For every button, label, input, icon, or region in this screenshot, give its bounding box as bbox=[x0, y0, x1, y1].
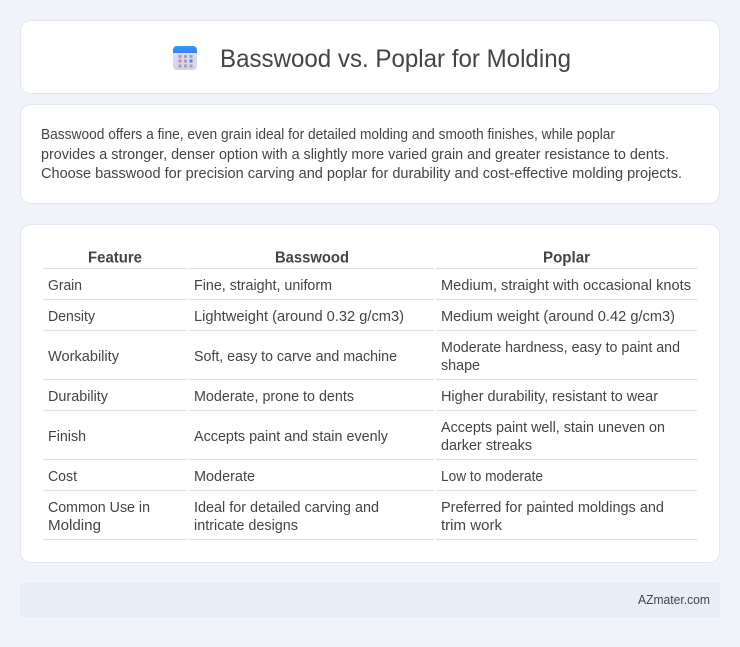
title text: Basswood vs. Poplar for Molding bbox=[220, 45, 571, 73]
row: grain bbox=[43, 278, 697, 300]
row: common use in molding bbox=[43, 500, 697, 540]
row: durability: Higher durability, resistant to wear bbox=[441, 389, 658, 405]
panel: introduction bbox=[20, 104, 720, 204]
row: common use in molding: trim work bbox=[441, 518, 503, 534]
table header bbox=[43, 250, 697, 268]
row: common use in molding: Molding bbox=[48, 518, 101, 534]
row: cost: Low to moderate bbox=[441, 469, 543, 485]
row: workability bbox=[43, 340, 697, 380]
intro text bbox=[41, 127, 682, 182]
row: common use in molding: Preferred for painted moldings and bbox=[441, 500, 664, 516]
row: workability: Moderate hardness, easy to paint and bbox=[441, 340, 680, 356]
row: density bbox=[43, 309, 697, 330]
row: workability: shape bbox=[441, 358, 480, 374]
intro text: Basswood offers a fine, even grain ideal for detailed molding and smooth finishes, while poplar bbox=[41, 127, 615, 143]
row: grain: Fine, straight, uniform bbox=[194, 278, 332, 294]
row: durability: Moderate, prone to dents bbox=[194, 389, 354, 405]
row: cost bbox=[43, 469, 697, 490]
row: common use in molding: Common Use in bbox=[48, 500, 150, 516]
panel: comparison table bbox=[20, 224, 720, 562]
row: cost: Moderate bbox=[194, 469, 255, 485]
table header: Basswood bbox=[275, 250, 349, 266]
footer bar bbox=[20, 583, 720, 617]
row: durability: Durability bbox=[48, 389, 109, 405]
row: grain: Medium, straight with occasional knots bbox=[441, 278, 691, 294]
row: workability: Workability bbox=[48, 349, 120, 365]
footer brand text: AZmater.com bbox=[638, 593, 710, 607]
table header: Feature bbox=[88, 250, 142, 266]
row: common use in molding: intricate designs bbox=[194, 518, 298, 534]
row: finish: Accepts paint and stain evenly bbox=[194, 429, 389, 445]
intro text: provides a stronger, denser option with a slightly more varied grain and greater resistance to dents. bbox=[41, 147, 669, 163]
row: density: Medium weight (around 0.42 g/cm3) bbox=[441, 309, 675, 325]
row: workability: Soft, easy to carve and machine bbox=[194, 349, 397, 365]
row: finish bbox=[43, 420, 697, 460]
panel: title bbox=[20, 20, 720, 94]
row: durability bbox=[43, 389, 697, 410]
row: grain: Grain bbox=[48, 278, 82, 294]
table header: Poplar bbox=[543, 250, 590, 266]
row: finish: Accepts paint well, stain uneven on bbox=[441, 420, 665, 436]
intro text: Choose basswood for precision carving and poplar for durability and cost-effective molding projects. bbox=[41, 166, 682, 182]
row: common use in molding: Ideal for detailed carving and bbox=[194, 500, 379, 516]
row: finish: darker streaks bbox=[441, 438, 532, 454]
row: density: Density bbox=[48, 309, 96, 325]
row: cost: Cost bbox=[48, 469, 77, 485]
icon: calendar bbox=[173, 46, 197, 70]
row: density: Lightweight (around 0.32 g/cm3) bbox=[194, 309, 404, 325]
row: finish: Finish bbox=[48, 429, 86, 445]
